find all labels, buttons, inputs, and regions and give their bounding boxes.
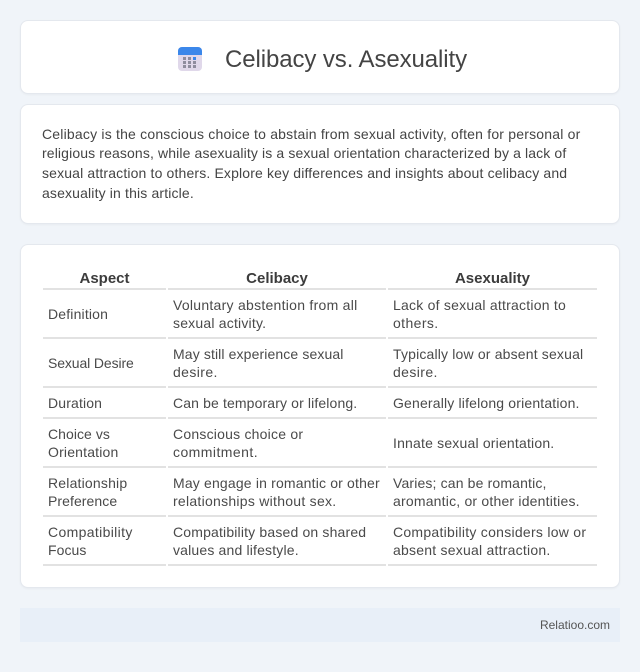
title: Celibacy vs. Asexuality xyxy=(225,46,467,73)
text block: introduction: asexuality in this article. xyxy=(42,185,194,201)
row: sexual desire xyxy=(48,346,583,380)
panel: title header xyxy=(20,20,620,94)
text block: introduction xyxy=(42,126,581,201)
row: definition: others. xyxy=(393,315,439,331)
row: compatibility focus: Focus xyxy=(48,542,86,558)
text block: introduction: sexual attraction to others. Explore key differences and insights about celibacy and xyxy=(42,165,567,181)
icon: calendar xyxy=(178,47,202,71)
table header: asexuality: Asexuality xyxy=(455,270,530,287)
row: duration xyxy=(48,395,580,411)
row: relationship preference: Varies; can be romantic, xyxy=(393,475,547,491)
row: sexual desire: May still experience sexual xyxy=(173,346,344,362)
row: choice vs orientation: Choice vs xyxy=(48,426,110,442)
row: duration: Can be temporary or lifelong. xyxy=(173,395,357,411)
row: relationship preference: May engage in romantic or other xyxy=(173,475,380,491)
table header: aspect: Aspect xyxy=(79,270,130,287)
row: relationship preference: Preference xyxy=(48,493,117,509)
row: choice vs orientation xyxy=(48,426,554,460)
row: compatibility focus: Compatibility considers low or xyxy=(393,524,586,540)
row: definition: Lack of sexual attraction to xyxy=(393,297,566,313)
row: sexual desire: Sexual Desire xyxy=(48,355,134,371)
row: relationship preference: aromantic, or other identities. xyxy=(393,493,580,509)
row: compatibility focus: Compatibility xyxy=(48,524,133,540)
row: definition: Definition xyxy=(48,306,108,322)
row: compatibility focus xyxy=(48,524,586,558)
footer text: Relatioo.com xyxy=(540,618,610,632)
panel: introduction xyxy=(20,104,620,224)
row: compatibility focus: values and lifestyle. xyxy=(173,542,299,558)
row: sexual desire: desire. xyxy=(173,364,218,380)
row: sexual desire: desire. xyxy=(393,364,438,380)
row: duration: Generally lifelong orientation. xyxy=(393,395,580,411)
row: choice vs orientation: Conscious choice or xyxy=(173,426,303,442)
row: definition: sexual activity. xyxy=(173,315,266,331)
row: choice vs orientation: Innate sexual orientation. xyxy=(393,435,554,451)
panel: comparison table xyxy=(20,244,620,588)
row: relationship preference: relationships without sex. xyxy=(173,493,336,509)
row: choice vs orientation: Orientation xyxy=(48,444,118,460)
footer xyxy=(20,608,620,642)
row: relationship preference: Relationship xyxy=(48,475,127,491)
row: compatibility focus: absent sexual attraction. xyxy=(393,542,551,558)
row: choice vs orientation: commitment. xyxy=(173,444,258,460)
row: definition xyxy=(48,297,566,331)
row: relationship preference xyxy=(48,475,580,509)
row: definition: Voluntary abstention from all xyxy=(173,297,357,313)
text block: introduction: Celibacy is the conscious choice to abstain from sexual activity, often for personal or xyxy=(42,126,581,142)
row: compatibility focus: Compatibility based on shared xyxy=(173,524,366,540)
row: sexual desire: Typically low or absent sexual xyxy=(393,346,583,362)
text block: introduction: religious reasons, while asexuality is a sexual orientation characterized by a lack of xyxy=(42,145,566,161)
row: duration: Duration xyxy=(48,395,102,411)
table header: celibacy: Celibacy xyxy=(246,270,308,287)
